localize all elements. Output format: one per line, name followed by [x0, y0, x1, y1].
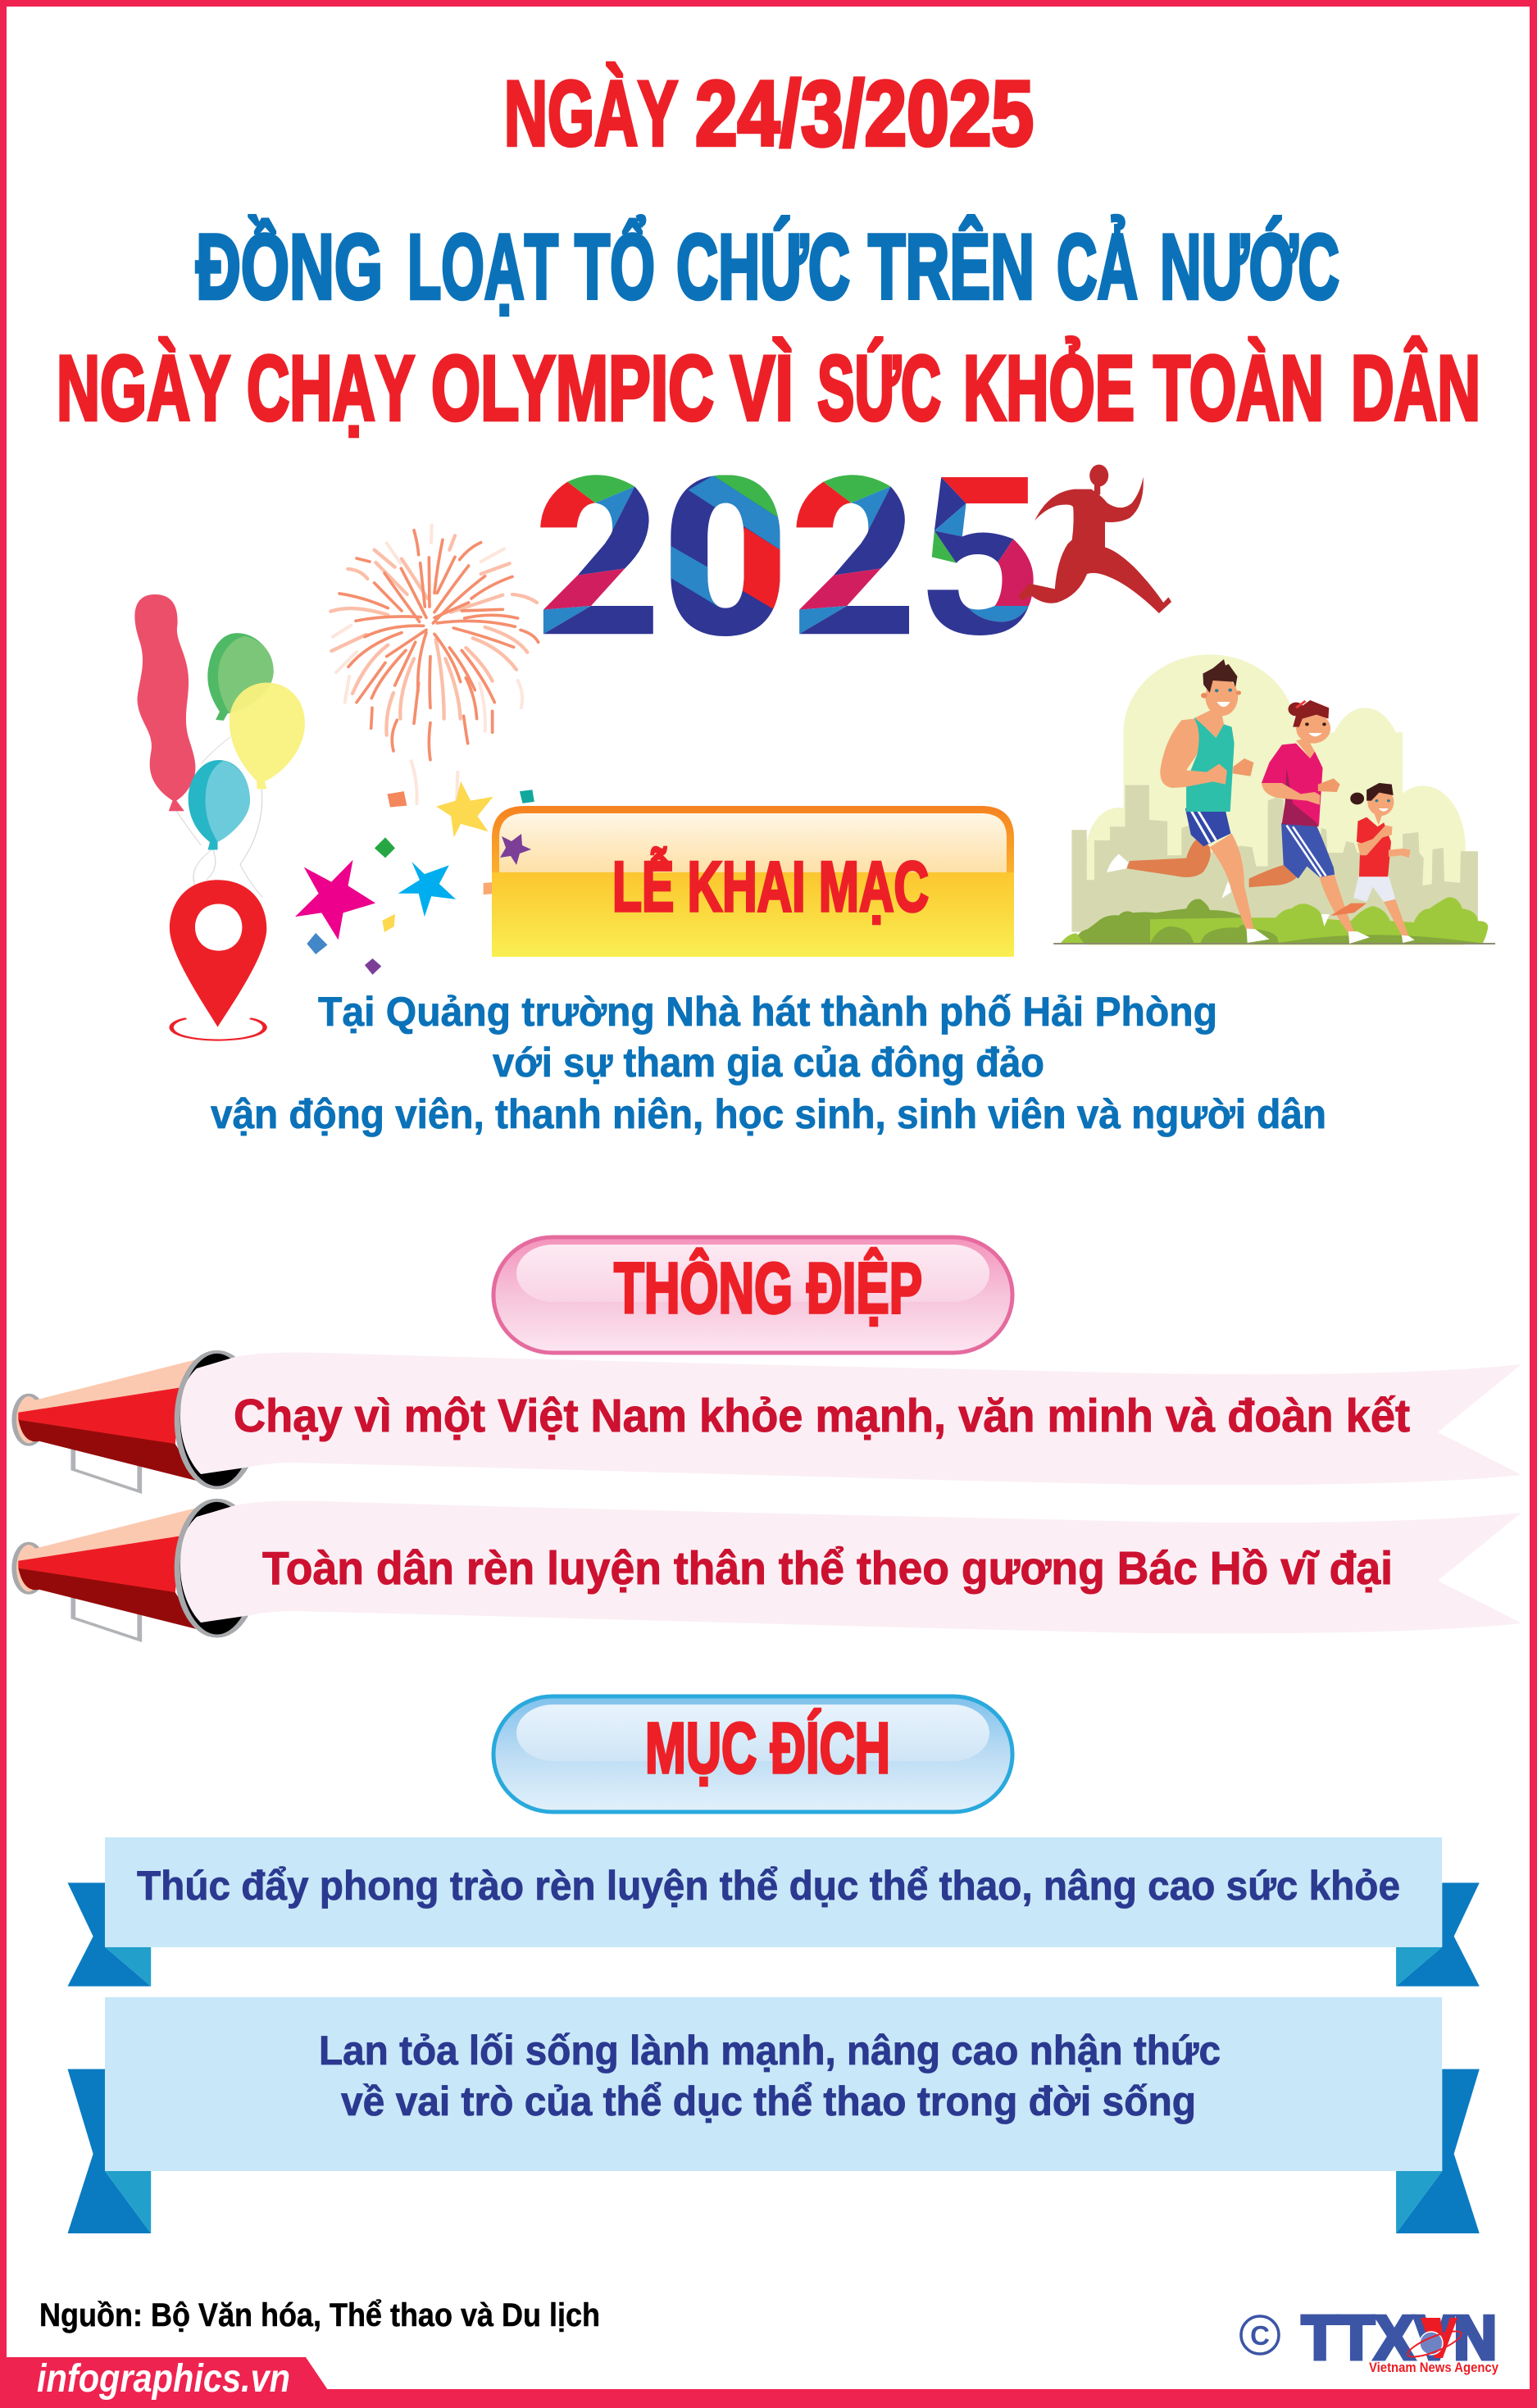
heading: opening ceremony: LỄ KHAI MẠC [612, 848, 929, 926]
confetti pieces [307, 790, 534, 975]
light streaks [330, 535, 537, 735]
panel: purpose pill heading [493, 1696, 1012, 1812]
icon: location pin [170, 880, 266, 1040]
balloon: green [207, 633, 274, 721]
figure: man [1107, 659, 1270, 943]
text block: venue [211, 989, 1326, 1137]
balloon: yellow [230, 683, 305, 789]
heading: line two: NƯỚC [1160, 216, 1339, 318]
dark streaks [339, 530, 539, 760]
pale background blobs [1086, 654, 1466, 945]
footer tab: infographics.vn [37, 2357, 290, 2401]
logo: 2025 with runner [540, 465, 1171, 638]
panel: opening ceremony button [492, 806, 1014, 957]
purpose text [319, 2028, 1221, 2124]
heading: date: 24/3/2025 [695, 62, 1034, 165]
title [57, 62, 1480, 439]
text block: venue: vận động viên, thanh niên, học sinh, sinh viên và người dân [211, 1091, 1326, 1137]
city skyline [1071, 785, 1478, 932]
heading: line two [196, 216, 1339, 318]
heading: date: NGÀY [504, 62, 678, 165]
ribbon banner [180, 1353, 1521, 1485]
heading: line two: TRÊN [868, 216, 1035, 318]
star: yellow [436, 781, 493, 837]
copyright mark: C [1250, 2320, 1270, 2351]
digit 2 second [796, 475, 909, 634]
heading: date [504, 62, 1034, 165]
panel: message pill heading [493, 1237, 1012, 1353]
heading: line three [57, 337, 1480, 439]
heading: purpose: MỤC ĐÍCH [645, 1709, 890, 1788]
text block: venue: Tại Quảng trường Nhà hát thành phố Hải Phòng [318, 989, 1217, 1035]
digit 2 [540, 475, 653, 634]
purpose text: Lan tỏa lối sống lành mạnh, nâng cao nhận thức [319, 2028, 1221, 2073]
ribbon tails [68, 1882, 1480, 1987]
ribbon banner [180, 1501, 1521, 1633]
pale streaks [333, 526, 522, 810]
balloon: pink [134, 594, 195, 811]
star: magenta [295, 860, 375, 940]
heading: message: THÔNG ĐIỆP [614, 1249, 922, 1328]
heading: line two: CHỨC [676, 216, 850, 318]
illustration: balloons, stars, confetti [134, 594, 534, 975]
heading: line three: CHẠY [247, 337, 415, 439]
heading: line three: VÌ [730, 337, 794, 439]
message text: Chạy vì một Việt Nam khỏe mạnh, văn minh và đoàn kết [234, 1390, 1410, 1442]
message text: Toàn dân rèn luyện thân thể theo gương Bác Hồ vĩ đại [262, 1542, 1393, 1595]
illustration: fireworks [330, 526, 539, 810]
ground line [1053, 943, 1495, 945]
balloon: blue [189, 760, 250, 849]
figure: woman [1221, 700, 1370, 944]
digit 5 [927, 477, 1034, 635]
text block: venue: với sự tham gia của đông đảo [493, 1040, 1044, 1086]
icon: megaphone [14, 1500, 257, 1640]
heading: line two: ĐỒNG [196, 216, 383, 318]
figure: child [1321, 783, 1415, 943]
panel: purpose one ribbon [68, 1837, 1480, 1987]
heading: line three: OLYMPIC [431, 337, 714, 439]
logo: TTXVN: TTXVN [1302, 2303, 1497, 2372]
heading: line two: CẢ [1057, 216, 1138, 318]
logo: TTXVN: Vietnam News Agency [1369, 2360, 1498, 2375]
source line: Nguồn: Bộ Văn hóa, Thể thao và Du lịch [39, 2297, 600, 2333]
panel: message two with megaphone [14, 1500, 1521, 1640]
panel: purpose two ribbon [68, 1997, 1480, 2233]
panel: message one with megaphone [14, 1352, 1521, 1491]
balloon strings [176, 737, 263, 897]
heading: line three: NGÀY [57, 337, 230, 439]
star: purple [500, 834, 531, 865]
purpose text: Thúc đẩy phong trào rèn luyện thể dục thể thao, nâng cao sức khỏe [137, 1863, 1400, 1909]
copyright mark [1241, 2316, 1279, 2354]
bushes [1061, 897, 1488, 944]
star: blue [398, 862, 456, 917]
heading: line two: TỔ [575, 216, 655, 318]
heading: line two: LOẠT [407, 216, 558, 318]
icon: running figure [1018, 465, 1171, 613]
icon: megaphone [14, 1352, 257, 1491]
ribbon tails [68, 2069, 1480, 2233]
illustration: family jogging [1053, 654, 1495, 945]
heading: line three: SỨC [817, 337, 941, 439]
heading: line three: KHỎE [963, 337, 1135, 439]
heading: line three: TOÀN [1153, 337, 1324, 439]
digit 0 [667, 473, 783, 638]
purpose text: về vai trò của thể dục thể thao trong đời sống [341, 2078, 1196, 2124]
